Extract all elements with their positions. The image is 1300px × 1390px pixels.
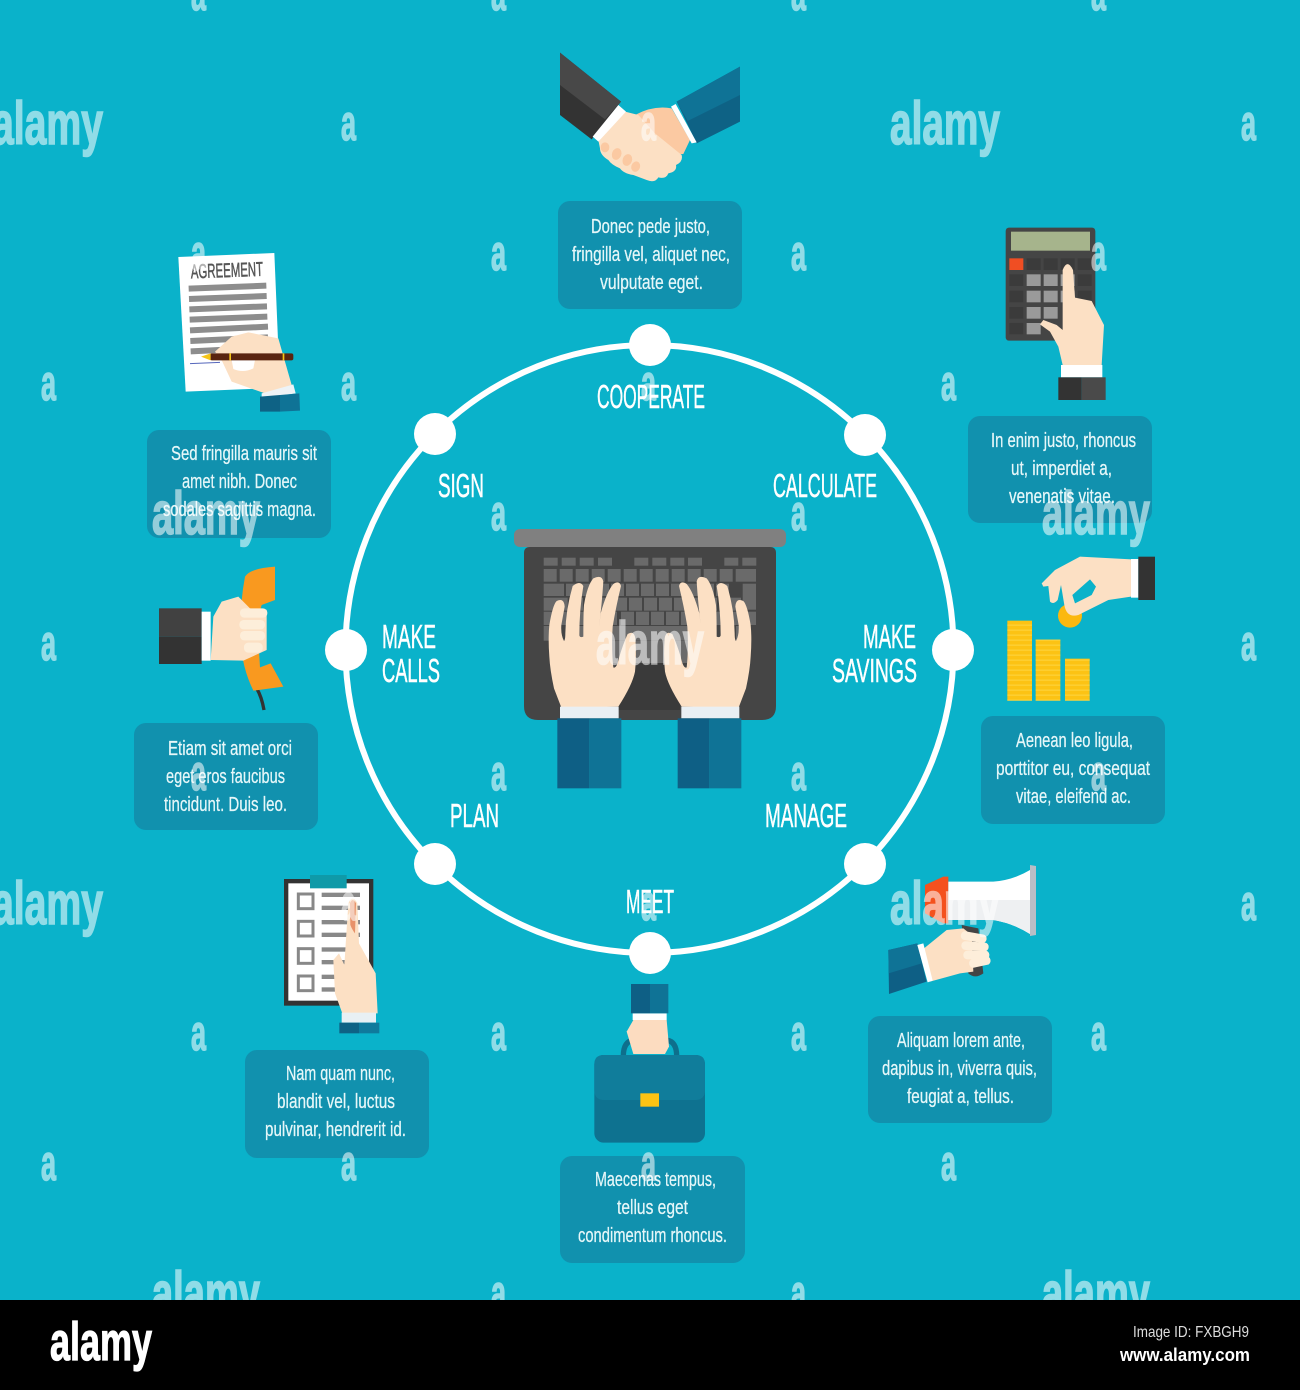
watermark: small a marks: a <box>341 1135 357 1191</box>
panel: cooperate <box>558 201 742 309</box>
watermark: large alamy marks: alamy <box>596 610 704 677</box>
watermark: small a marks: a <box>341 875 357 931</box>
watermark: small a marks: a <box>341 355 357 411</box>
panel: meet: Maecenas tempus, <box>595 1169 716 1191</box>
watermark: small a marks: a <box>1241 875 1257 931</box>
ring labels: CALCULATE <box>773 467 877 504</box>
watermark: small a marks: a <box>941 1135 957 1191</box>
footer bar: alamy <box>50 1312 152 1372</box>
icon: handshake <box>560 53 740 181</box>
panel: make calls <box>134 723 318 830</box>
watermark: small a marks: a <box>491 1005 507 1061</box>
ring labels: SAVINGS <box>832 652 917 689</box>
panel: manage: feugiat a, tellus. <box>907 1086 1014 1108</box>
watermark: small a marks: a <box>191 745 207 801</box>
panel: make calls: eget eros faucibus <box>166 766 285 788</box>
icon: checklist clipboard with hand <box>284 875 379 1033</box>
footer bar: www.alamy.com <box>1119 1345 1250 1365</box>
watermark: small a marks: a <box>1241 615 1257 671</box>
watermark: small a marks: a <box>941 355 957 411</box>
panel: meet: condimentum rhoncus. <box>578 1225 727 1247</box>
panel: plan: pulvinar, hendrerit id. <box>265 1119 406 1141</box>
watermark: small a marks: a <box>791 225 807 281</box>
panel: calculate <box>968 416 1152 523</box>
ring labels: MEET <box>626 883 674 920</box>
watermark: small a marks: a <box>641 1135 657 1191</box>
footer bar: Image ID: FXBGH9 <box>1133 1324 1249 1341</box>
panel: calculate: In enim justo, rhoncus <box>991 430 1136 452</box>
watermark: small a marks: a <box>191 1005 207 1061</box>
panel: calculate: venenatis vitae. <box>1009 486 1115 508</box>
watermark: small a marks: a <box>341 95 357 151</box>
icon: telephone handset in hand <box>159 567 283 710</box>
watermark: small a marks: a <box>791 1005 807 1061</box>
icon: megaphone in hand <box>888 865 1036 994</box>
panel: cooperate: Donec pede justo, <box>591 216 710 238</box>
panel: calculate: ut, imperdiet a, <box>1011 458 1112 480</box>
ring labels: MAKE <box>863 618 916 655</box>
watermark: large alamy marks: alamy <box>890 90 1000 157</box>
watermark: small a marks: a <box>641 95 657 151</box>
watermark: small a marks: a <box>641 875 657 931</box>
panel: sign: sodales sagittis magna. <box>163 499 316 521</box>
watermark: small a marks: a <box>41 355 57 411</box>
watermark: small a marks: a <box>491 485 507 541</box>
panel: sign: Sed fringilla mauris sit <box>171 443 317 465</box>
icon: agreement document with signing hand <box>178 253 300 412</box>
ring labels: PLAN <box>450 797 499 834</box>
watermark: small a marks: a <box>941 615 957 671</box>
watermark: small a marks: a <box>1091 1005 1107 1061</box>
panel: meet: tellus eget <box>617 1197 688 1219</box>
watermark: large alamy marks: alamy <box>1042 1260 1150 1327</box>
watermark: large alamy marks: alamy <box>890 870 1000 937</box>
panel: sign: amet nibh. Donec <box>182 471 297 493</box>
icon: calculator with hand <box>1006 228 1106 400</box>
watermark: small a marks: a <box>791 485 807 541</box>
watermark: large alamy marks: alamy <box>152 480 260 547</box>
panel: plan <box>245 1050 429 1158</box>
panel: sign <box>147 430 331 538</box>
footer bar <box>0 1300 1300 1390</box>
ring labels: MAKE <box>382 618 436 655</box>
central laptop with typing hands <box>514 529 786 788</box>
watermark: small a marks: a <box>41 1135 57 1191</box>
watermark: large alamy marks: alamy <box>1042 480 1150 547</box>
icon: briefcase in hand <box>594 984 705 1143</box>
ring labels: CALLS <box>382 652 440 689</box>
panel: make savings: Aenean leo ligula, <box>1016 730 1133 752</box>
watermark: small a marks: a <box>791 745 807 801</box>
watermark: small a marks: a <box>341 615 357 671</box>
ring labels: SIGN <box>438 467 484 504</box>
process ring <box>325 324 974 974</box>
ring labels: COOPERATE <box>597 378 705 415</box>
watermark: small a marks: a <box>791 1265 807 1321</box>
panel: make savings: vitae, eleifend ac. <box>1016 786 1131 808</box>
panel: plan: Nam quam nunc, <box>286 1063 395 1085</box>
watermark: small a marks: a <box>191 225 207 281</box>
panel: make calls: Etiam sit amet orci <box>168 738 292 760</box>
watermark: small a marks: a <box>1091 225 1107 281</box>
panel: meet <box>560 1156 745 1263</box>
watermark: small a marks: a <box>491 745 507 801</box>
ring labels <box>382 378 917 920</box>
icon: agreement document with signing hand: AGREEMENT <box>190 259 263 283</box>
panel: make savings: porttitor eu, consequat <box>996 758 1150 780</box>
panel: plan: blandit vel, luctus <box>277 1091 395 1113</box>
watermark: small a marks: a <box>491 1265 507 1321</box>
icon: coin stacks with hand <box>1007 557 1155 701</box>
panel: manage <box>868 1016 1052 1123</box>
watermark: small a marks: a <box>641 355 657 411</box>
watermark: small a marks: a <box>491 225 507 281</box>
ring labels: MANAGE <box>765 797 847 834</box>
panel: manage: dapibus in, viverra quis, <box>882 1058 1037 1080</box>
panel: make calls: tincidunt. Duis leo. <box>164 794 287 816</box>
watermark: large alamy marks <box>0 90 1150 1327</box>
watermark: large alamy marks: alamy <box>152 1260 260 1327</box>
panel: make savings <box>981 716 1165 824</box>
watermark: small a marks: a <box>1091 745 1107 801</box>
panel: manage: Aliquam lorem ante, <box>897 1030 1025 1052</box>
panel: cooperate: fringilla vel, aliquet nec, <box>572 244 730 266</box>
watermark: small a marks: a <box>41 615 57 671</box>
watermark: small a marks: a <box>1241 95 1257 151</box>
panel: cooperate: vulputate eget. <box>600 272 703 294</box>
